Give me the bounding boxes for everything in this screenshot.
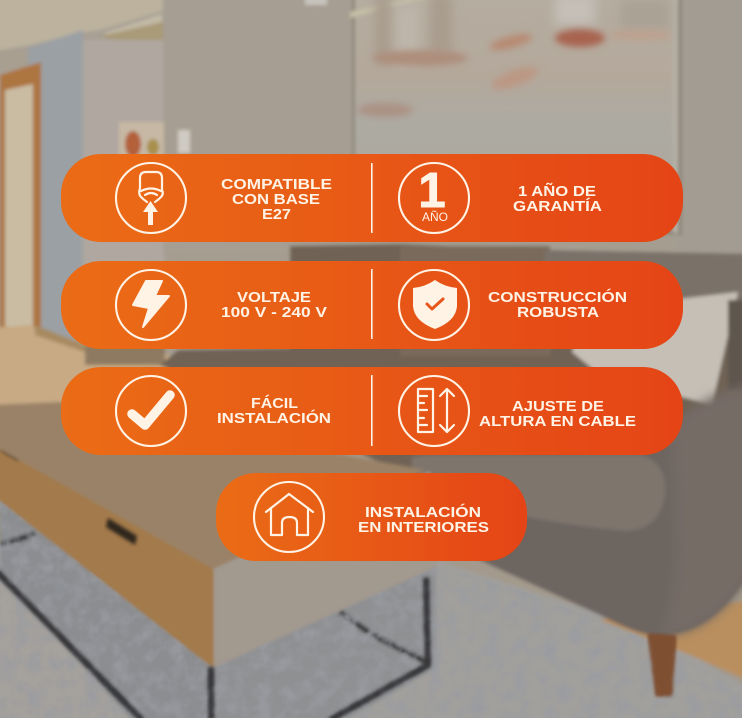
icon: ruler and height arrow xyxy=(399,376,469,446)
door xyxy=(0,62,41,340)
text: construcción robusta xyxy=(488,288,627,321)
left walls xyxy=(28,30,83,340)
text: 1 año de garantía xyxy=(513,182,603,215)
icon: E27 bulb base with arrow xyxy=(116,163,186,233)
pillow xyxy=(572,292,738,405)
painting xyxy=(352,0,682,235)
icon: 1 year xyxy=(399,163,469,233)
table legs xyxy=(0,534,428,718)
text: ajuste de altura: AJUSTE DE xyxy=(512,399,604,415)
main wall xyxy=(163,0,353,250)
rug base xyxy=(0,490,742,718)
text: fácil instalación: INSTALACIÓN xyxy=(217,409,331,427)
sofa leg front xyxy=(648,634,676,696)
text: 1 año de garantía: 1 AÑO DE xyxy=(518,182,596,200)
icon: 1 year: AÑO xyxy=(422,210,448,224)
text: compatible con base E27: COMPATIBLE xyxy=(221,177,332,193)
sofa back xyxy=(160,244,742,480)
text: 1 año de garantía: GARANTÍA xyxy=(513,198,603,215)
text: construcción robusta: CONSTRUCCIÓN xyxy=(488,288,627,306)
text: instalación en interiores: EN INTERIORES xyxy=(358,520,489,536)
text: compatible con base E27: E27 xyxy=(262,207,291,223)
panel: row 2 xyxy=(61,261,683,349)
icon: 1 year: 1 xyxy=(418,164,446,218)
left floor xyxy=(0,325,170,420)
text: voltaje xyxy=(221,290,327,321)
text: instalación en interiores xyxy=(358,503,489,536)
panel: row 3 xyxy=(61,367,683,455)
table side repeat xyxy=(213,472,436,667)
table xyxy=(0,402,425,571)
ceiling xyxy=(0,0,165,50)
panel: row 1 xyxy=(61,154,683,242)
text: compatible con base E27: CON BASE xyxy=(232,192,320,208)
icon: shield xyxy=(399,270,469,340)
icon: house xyxy=(254,482,324,552)
text: fácil instalación xyxy=(217,395,331,427)
icon: lightning bolt xyxy=(116,270,186,340)
text: voltaje: VOLTAJE xyxy=(237,290,311,306)
text: fácil instalación: FÁCIL xyxy=(251,395,298,412)
panel: row 4 xyxy=(216,473,527,561)
text: ajuste de altura xyxy=(479,399,636,430)
small picture xyxy=(119,122,164,156)
text: instalación en interiores: INSTALACIÓN xyxy=(365,503,481,521)
text: ajuste de altura: ALTURA EN CABLE xyxy=(479,414,636,430)
seat cushion xyxy=(411,454,665,531)
wood floor right xyxy=(600,600,742,682)
sofa leg xyxy=(648,634,676,696)
text: construcción robusta: ROBUSTA xyxy=(517,305,600,321)
sofa body xyxy=(410,400,742,636)
icon: check mark xyxy=(116,376,186,446)
text: voltaje: 100 V - 240 V xyxy=(221,305,327,321)
text: compatible con base E27 xyxy=(221,177,332,223)
